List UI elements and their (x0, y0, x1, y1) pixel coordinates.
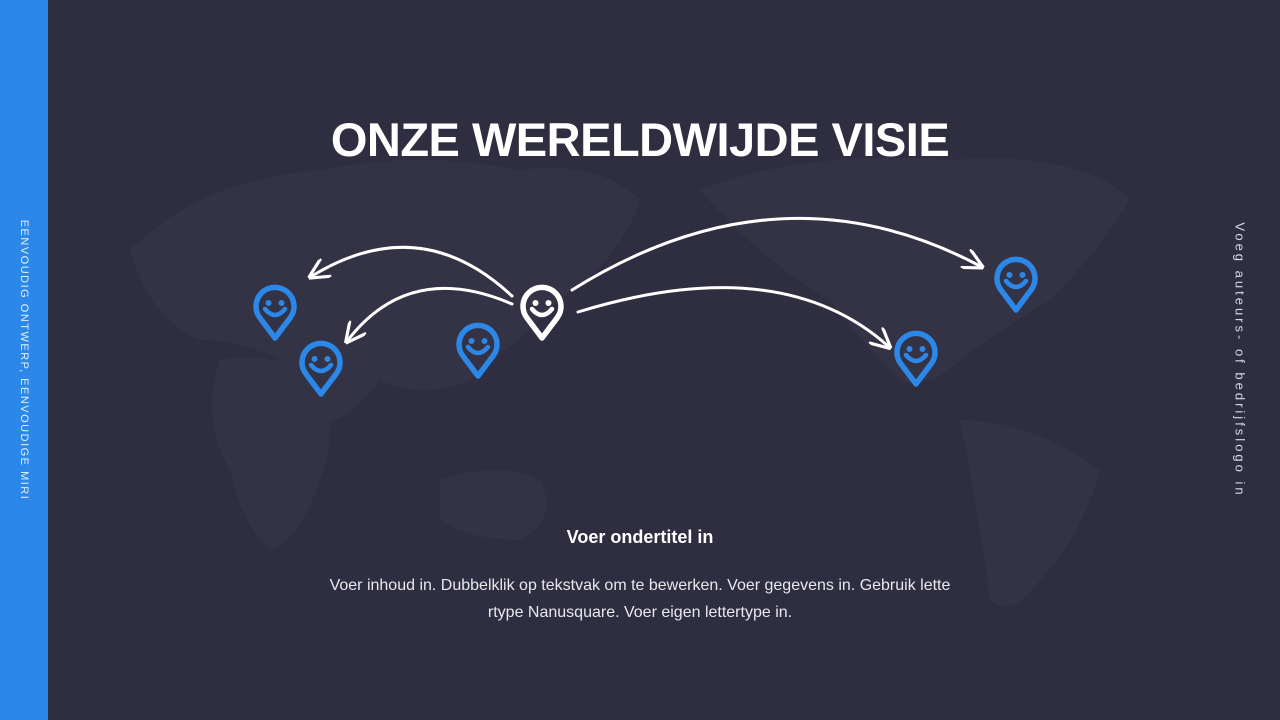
pins (256, 259, 1035, 394)
subtitle: Voer ondertitel in (567, 527, 713, 547)
arrows (312, 218, 980, 346)
left accent bar (0, 0, 48, 720)
title: ONZE WERELDWIJDE VISIE (331, 113, 949, 166)
vertical right text: Voeg auteurs- of bedrijfslogo in (1232, 222, 1248, 498)
body text: rtype Nanusquare. Voer eigen lettertype in. (488, 604, 792, 621)
body text (330, 577, 950, 621)
vertical left text: EENVOUDIG ONTWERP, EENVOUDIGE MIRI (18, 220, 30, 500)
body text: Voer inhoud in. Dubbelklik op tekstvak om te bewerken. Voer gegevens in. Gebruik lette (330, 577, 950, 594)
